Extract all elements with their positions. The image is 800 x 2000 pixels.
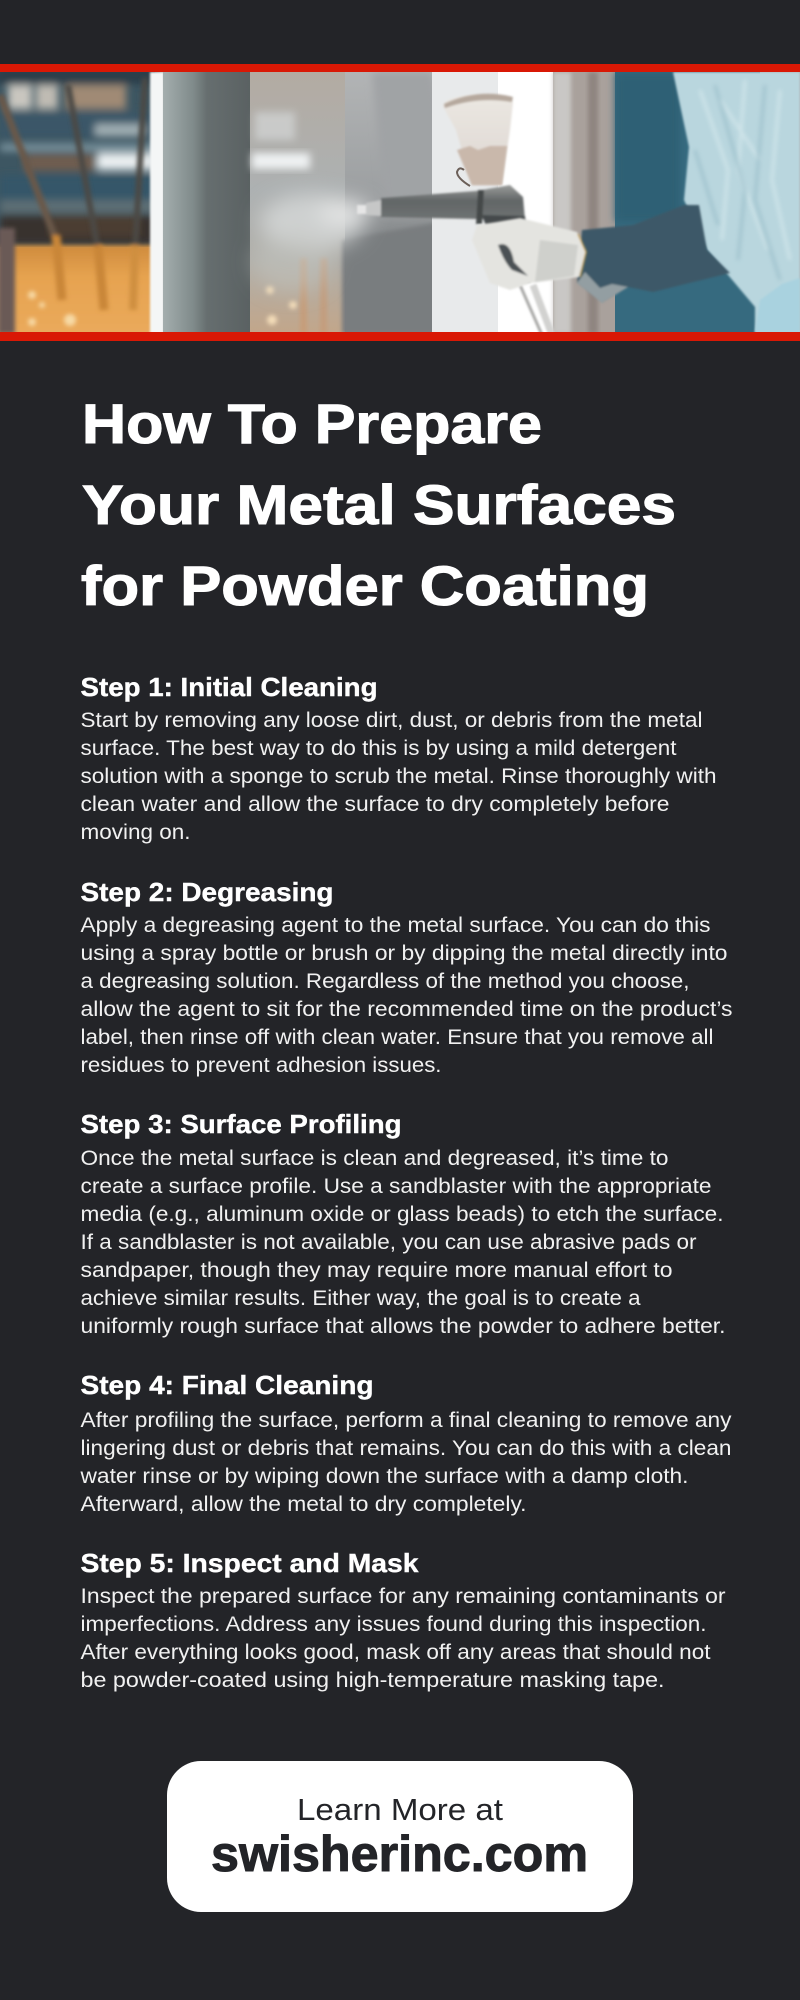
text: step 5 body	[80, 1584, 726, 1692]
photo: glove	[472, 218, 586, 290]
panel: step 4	[79, 1370, 732, 1516]
photo: frame and teal wall	[553, 72, 760, 334]
title	[81, 392, 676, 617]
panel: step 1	[80, 672, 716, 844]
callout text: website: swisherinc.com	[211, 1826, 588, 1882]
title: for Powder Coating	[81, 554, 649, 617]
text: step 2 body: Apply a degreasing agent to the metal surface. You can do this	[80, 913, 711, 937]
photo: sleeve	[577, 205, 730, 303]
text: step 2 body: label, then rinse off with clean water. Ensure that you remove all	[80, 1025, 714, 1049]
panel: step 2	[80, 877, 732, 1077]
text: step 2 body: residues to prevent adhesion issues.	[80, 1053, 442, 1077]
text: step 3 body: uniformly rough surface that allows the powder to adhere better.	[80, 1314, 725, 1338]
text: step 4 body: lingering dust or debris that remains. You can do this with a clean	[80, 1436, 732, 1460]
text: step 4 body: Afterward, allow the metal to dry completely.	[80, 1492, 526, 1516]
panel: step 3	[80, 1109, 725, 1338]
heading: step 5: Step 5: Inspect and Mask	[80, 1548, 419, 1578]
photo: coating suit	[673, 72, 800, 340]
callout text: learn more at: Learn More at	[297, 1792, 503, 1827]
text: step 1 body: Start by removing any loose dirt, dust, or debris from the metal	[80, 708, 702, 732]
text: step 3 body: sandpaper, though they may require more manual effort to	[80, 1258, 673, 1282]
photo: worker powder coating with a spray gun	[0, 68, 800, 340]
text: step 5 body: be powder-coated using high-temperature masking tape.	[80, 1668, 664, 1692]
text: step 2 body: a degreasing solution. Regardless of the method you choose,	[80, 969, 690, 993]
text: step 3 body: Once the metal surface is clean and degreased, it’s time to	[80, 1146, 669, 1170]
text: step 2 body	[80, 913, 732, 1077]
text: step 2 body: using a spray bottle or brush or by dipping the metal directly into	[80, 941, 728, 965]
text: step 3 body	[80, 1146, 725, 1338]
text: step 4 body: water rinse or by wiping down the surface with a damp cloth.	[79, 1464, 689, 1488]
top red border	[0, 64, 800, 72]
bottom red border	[0, 332, 800, 341]
text: step 1 body: surface. The best way to do this is by using a mild detergent	[80, 736, 677, 760]
text: step 5 body: After everything looks good, mask off any areas that should not	[80, 1640, 711, 1664]
text: step 3 body: If a sandblaster is not available, you can use abrasive pads or	[80, 1230, 696, 1254]
text: step 1 body	[80, 708, 716, 844]
photo: spray gun	[356, 184, 527, 226]
text: step 1 body: moving on.	[80, 820, 190, 844]
heading: step 3: Step 3: Surface Profiling	[80, 1109, 402, 1139]
photo: mist-filled booth	[250, 72, 442, 334]
text: step 5 body: Inspect the prepared surface for any remaining contaminants or	[80, 1584, 726, 1608]
photo: factory background on the left	[0, 68, 160, 335]
callout: learn more	[167, 1761, 633, 1912]
heading: step 2: Step 2: Degreasing	[80, 877, 334, 907]
title: Your Metal Surfaces	[82, 473, 676, 536]
text: step 3 body: achieve similar results. Either way, the goal is to create a	[80, 1286, 641, 1310]
text: step 1 body: clean water and allow the surface to dry completely before	[80, 792, 670, 816]
photo: column	[150, 72, 251, 334]
text: step 3 body: media (e.g., aluminum oxide or glass beads) to etch the surface.	[80, 1202, 724, 1226]
text: step 2 body: allow the agent to sit for the recommended time on the product’s	[80, 997, 732, 1021]
text: step 4 body: After profiling the surface, perform a final cleaning to remove any	[80, 1408, 732, 1432]
panel: step 5	[80, 1548, 726, 1692]
text: step 3 body: create a surface profile. Use a sandblaster with the appropriate	[80, 1174, 712, 1198]
heading: step 4: Step 4: Final Cleaning	[80, 1370, 374, 1400]
text: step 4 body	[79, 1408, 732, 1516]
photo: paint cup	[443, 94, 513, 186]
text: step 5 body: imperfections. Address any issues found during this inspection.	[80, 1612, 706, 1636]
heading: step 1: Step 1: Initial Cleaning	[80, 672, 378, 702]
photo: spray cloud	[252, 194, 371, 292]
title: How To Prepare	[82, 392, 542, 455]
photo: hose	[520, 285, 552, 335]
text: step 1 body: solution with a sponge to scrub the metal. Rinse thoroughly with	[80, 764, 716, 788]
photo: white panel and bright window	[432, 72, 554, 334]
